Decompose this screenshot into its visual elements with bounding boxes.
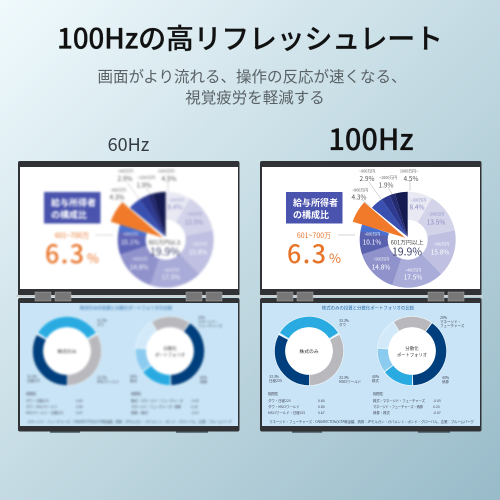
correlation tables: 債券・株式	[373, 410, 391, 415]
upper screen: income composition	[44, 170, 207, 282]
pie labels: ~300万円	[433, 242, 449, 248]
correlation tables: マネージド・フューチャーズ・債券	[131, 404, 182, 409]
correlation tables: 0.60	[76, 398, 83, 403]
pie labels: 10.1%	[121, 236, 139, 246]
pie labels: 17.5%	[162, 272, 180, 282]
correlation tables: 0.80	[76, 404, 83, 409]
upper screen: income composition	[262, 167, 480, 289]
correlation tables: MSCIワールド・日経225	[268, 410, 305, 415]
pie labels: ~1000万円	[379, 176, 397, 181]
donut labels: 20%	[198, 316, 206, 321]
pie labels: 8.4%	[409, 202, 425, 212]
donut labels: 33.3%	[97, 319, 108, 324]
highlight: 601~700万 6.3%: %	[329, 248, 341, 267]
correlation tables: 0.67	[76, 410, 83, 415]
footnote: マネージド・フューチャーズ：CAIGAM CTOSのCTA等金額、債券：JPモルガン・ガバメント・ボンド・グローバル、企業：ブルームバーグ	[27, 419, 232, 425]
upper monitor frame	[260, 161, 482, 296]
monitor feet	[50, 432, 208, 433]
donut labels: 40%	[200, 376, 208, 381]
pie labels: 17.5%	[404, 272, 422, 282]
correlation tables: マネージド・フューチャーズ・債券	[373, 404, 424, 409]
highlight: 601~700万 6.3%	[287, 231, 341, 271]
pie labels: ~800万円	[110, 188, 126, 194]
correlation tables: 0.67	[318, 410, 325, 415]
pie labels	[109, 170, 207, 282]
pie labels: ~600万円	[364, 232, 380, 238]
pie labels: 1.9%	[378, 180, 394, 190]
lower monitor frame	[18, 298, 240, 432]
donut labels: 40%	[372, 375, 380, 380]
lower monitor frame	[260, 298, 482, 432]
correlation tables	[26, 391, 199, 415]
donut labels: 33.3%	[97, 376, 108, 381]
title box: 給与所得者	[51, 196, 96, 209]
pie labels: ~900万円	[117, 170, 133, 174]
highlight: 601~700万 6.3%: 6.3	[287, 235, 327, 271]
title box	[286, 192, 342, 224]
lower screen: portfolio comparison	[262, 303, 480, 426]
donut labels: ダウ	[339, 322, 346, 328]
correlation tables	[268, 391, 441, 415]
donut labels: 40%	[130, 375, 138, 380]
donut labels: ダウ	[97, 322, 104, 328]
donut labels: 20%	[440, 316, 448, 321]
pie labels: 14.8%	[130, 262, 148, 272]
correlation tables: 0.20	[191, 404, 198, 409]
donut labels: 33.3%	[339, 376, 350, 381]
pie chart	[111, 192, 200, 274]
donut: stocks only: 株式のみ	[57, 348, 77, 355]
highlight: 601~700万 6.3%: 6.3	[45, 235, 85, 271]
donut: stocks only	[269, 311, 349, 391]
footnote: マネージド・フューチャーズ：CAIGAM CTOSのCTA等金額、債券：JPモルガン・ガバメント・ボンド・グローバル、企業：ブルームバーグ	[269, 419, 474, 425]
upper screen background	[20, 167, 238, 289]
correlation tables: 債券・株式	[131, 410, 149, 415]
subtitle: 視覚疲労を軽減する	[185, 86, 325, 108]
donut: diversified portfolio: 分散化	[405, 345, 419, 352]
upper monitor frame	[18, 161, 240, 296]
donut: diversified portfolio: 分散化	[163, 345, 177, 352]
donut: stocks only: 株式のみ	[299, 348, 319, 355]
donut labels: フューチャーズ	[440, 323, 465, 329]
donut labels	[269, 316, 465, 385]
donut labels	[27, 316, 223, 385]
donut labels: 株式	[372, 378, 379, 384]
donut labels: 33.3%	[27, 375, 38, 380]
pie labels: ~200万円	[428, 212, 444, 218]
pie callout lines	[338, 181, 410, 235]
donut labels: マネージド・	[198, 319, 219, 325]
pie labels: ~800万円	[352, 188, 368, 194]
title box: の構成比	[51, 208, 87, 221]
pie chart	[353, 192, 442, 274]
pie labels: 15.8%	[189, 246, 207, 256]
correlation tables: 0.80	[318, 404, 325, 409]
lower screen background	[20, 303, 238, 426]
correlation tables: ダウ・MSCIワールド	[268, 404, 300, 409]
highlight: 601~700万 6.3%: %	[87, 248, 99, 267]
pie labels: 4.3%	[109, 192, 125, 202]
pie labels: 601万円以上	[391, 238, 424, 246]
donut: diversified portfolio: ポートフォリオ	[155, 352, 185, 358]
hinge strip	[258, 292, 483, 301]
pie labels: 19.9%	[150, 244, 180, 260]
title box	[44, 192, 100, 224]
donut labels: マネージド・	[440, 319, 461, 325]
donut: stocks only	[27, 311, 107, 391]
donut labels: 日経225	[27, 378, 40, 384]
hinge strip	[16, 292, 241, 301]
correlation tables: 0.20	[433, 404, 440, 409]
correlation tables: -0.05	[433, 398, 441, 403]
monitor feet	[292, 432, 450, 433]
donut labels: MSCIワールド	[97, 379, 120, 385]
donut labels: 33.3%	[339, 319, 350, 324]
pie labels: 19.9%	[392, 244, 422, 260]
pie labels: 2.9%	[359, 173, 375, 183]
correlation tables: 相関性	[373, 391, 384, 396]
pie labels: ~400万円	[405, 268, 421, 274]
correlation tables: -0.05	[191, 398, 199, 403]
pie labels: ~100万円	[168, 198, 184, 204]
lower screen: portfolio comparison: 株式のみの投資と分散化ポートフォリオの比較	[80, 304, 173, 312]
correlation tables: ダウ・MSCIワールド	[26, 404, 58, 409]
donut labels: 33.3%	[269, 375, 280, 380]
lower screen: portfolio comparison: 株式のみの投資と分散化ポートフォリオの比較	[322, 304, 415, 312]
correlation tables: 0.60	[318, 398, 325, 403]
correlation tables: 相関性	[268, 391, 279, 396]
pie labels: 2.9%	[117, 173, 133, 183]
pie labels: ~200万円	[186, 212, 202, 218]
pie labels: 8.4%	[167, 202, 183, 212]
correlation tables: MSCIワールド・日経225	[26, 410, 63, 415]
panel: 100Hz dual monitor (sharp)	[258, 161, 483, 433]
highlight: 601~700万 6.3%	[45, 231, 99, 271]
donut: diversified portfolio	[129, 310, 211, 392]
pie labels: ~1000万円	[137, 176, 155, 181]
pie labels: ~500万円	[373, 258, 389, 262]
pie labels: ~400万円	[163, 268, 179, 274]
pie labels: 13.5%	[427, 216, 445, 226]
donut labels: MSCIワールド	[339, 379, 362, 385]
pie labels: 13.5%	[185, 216, 203, 226]
lower screen: portfolio comparison	[26, 304, 232, 425]
pie labels: 15.8%	[431, 246, 449, 256]
pie labels: ~100万円	[410, 198, 426, 204]
pie labels: 601万円以上	[149, 238, 182, 246]
label: 100Hz: 100Hz	[328, 117, 414, 159]
correlation tables: 相関性	[131, 391, 142, 396]
donut labels: 40%	[442, 376, 450, 381]
pie labels: ~300万円	[191, 242, 207, 248]
donut labels: 債券	[200, 379, 207, 385]
pie labels: 4.5%	[403, 173, 419, 183]
correlation tables: 相関性	[26, 391, 37, 396]
pie labels	[351, 170, 449, 282]
title box: の構成比	[293, 208, 329, 221]
pie labels: 4.5%	[161, 173, 177, 183]
donut labels: フューチャーズ	[198, 323, 223, 329]
pie labels: ~500万円	[131, 258, 147, 262]
pie labels: 1000万円~	[158, 170, 176, 174]
highlight: 601~700万 6.3%: 601~700万	[55, 231, 89, 241]
subtitle: 画面がより流れる、操作の反応が速くなる、	[98, 65, 406, 87]
correlation tables: -0.07	[191, 410, 199, 415]
correlation tables: 株式・マネージド・フューチャーズ	[131, 398, 184, 403]
donut: diversified portfolio	[371, 310, 453, 392]
pie labels: 10.1%	[363, 236, 381, 246]
title box: 給与所得者	[293, 196, 338, 209]
subtitle	[98, 65, 406, 108]
donut labels: 日経225	[269, 378, 282, 384]
title: 100Hzの高リフレッシュレート	[57, 18, 443, 58]
pie labels: 1000万円~	[400, 170, 418, 174]
pie callout lines	[96, 181, 168, 235]
donut: diversified portfolio: ポートフォリオ	[397, 352, 427, 358]
donut labels: 債券	[442, 379, 449, 385]
highlight: 601~700万 6.3%: 601~700万	[297, 231, 331, 241]
donut labels: 株式	[130, 378, 137, 384]
pie labels: 4.3%	[351, 192, 367, 202]
correlation tables: ダウ・日経225	[268, 398, 291, 403]
correlation tables: -0.07	[433, 410, 441, 415]
pie labels: ~600万円	[122, 232, 138, 238]
pie labels: ~900万円	[359, 170, 375, 174]
pie labels: 1.9%	[136, 180, 152, 190]
pie labels: 14.8%	[372, 262, 390, 272]
correlation tables: 株式・マネージド・フューチャーズ	[373, 398, 426, 403]
panel: 60Hz dual monitor (blurred)	[16, 161, 241, 433]
correlation tables: ダウ・日経225	[26, 398, 49, 403]
label: 60Hz: 60Hz	[108, 131, 150, 157]
